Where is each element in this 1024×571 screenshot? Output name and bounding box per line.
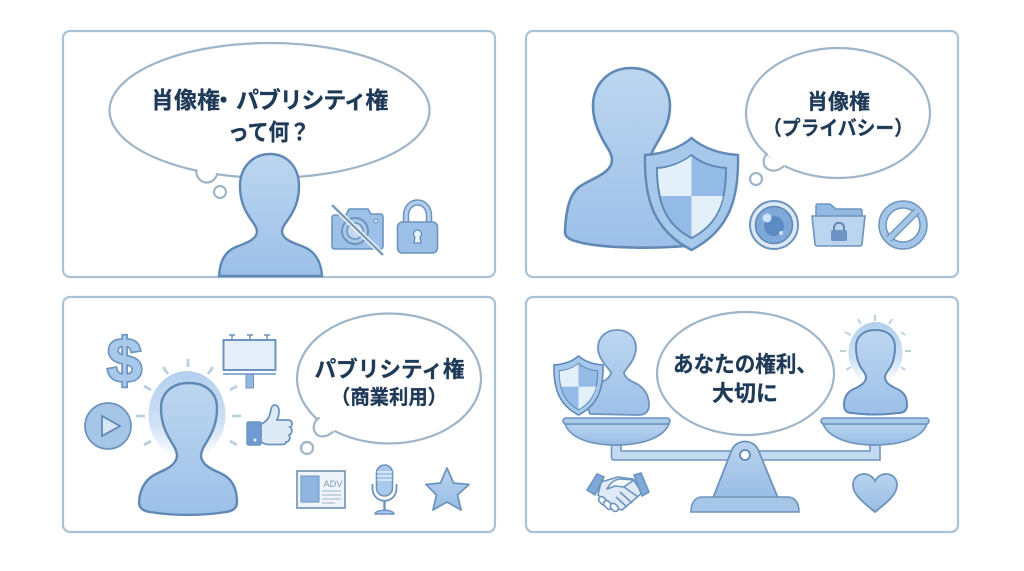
icon: padlock xyxy=(398,202,438,253)
icon: crossed-out camera xyxy=(332,205,383,255)
base xyxy=(691,497,799,512)
panel: take care of your rights xyxy=(526,297,958,532)
balance scale xyxy=(563,418,929,512)
icon: camera lens xyxy=(750,201,798,249)
icon: play button xyxy=(85,403,131,449)
heading: portrait rights (privacy): （プライバシー） xyxy=(763,117,913,140)
icon: locked folder xyxy=(812,204,865,246)
heading: publicity rights (commercial use) xyxy=(314,357,464,409)
icon: thumbs up xyxy=(247,405,292,445)
left pan xyxy=(563,418,670,445)
panel: portrait rights and privacy xyxy=(526,31,958,277)
icon: newspaper advert xyxy=(297,471,345,508)
heading: publicity rights (commercial use): （商業利用） xyxy=(331,386,447,409)
heading: take care of your rights xyxy=(673,352,817,406)
icon: billboard xyxy=(223,335,276,388)
icon: newspaper advert: ADV xyxy=(324,479,342,489)
heading: what are portrait and publicity rights: パブリシティ権 xyxy=(236,87,388,113)
speech bubble xyxy=(297,314,481,454)
icon: handshake xyxy=(587,473,649,513)
person with shield on left pan xyxy=(554,330,649,415)
icon: shield xyxy=(554,356,603,415)
icon: heart xyxy=(853,474,897,512)
icon: star xyxy=(426,468,469,510)
icon: shield xyxy=(645,138,738,250)
right pan xyxy=(821,418,929,445)
icon: prohibited sign xyxy=(879,201,927,249)
heading: what are portrait and publicity rights: って何？ xyxy=(228,119,310,145)
heading: take care of your rights: 大切に xyxy=(712,381,778,406)
heading: portrait rights (privacy) xyxy=(763,91,913,140)
heading: what are portrait and publicity rights: ・ xyxy=(212,87,235,113)
panel: publicity rights xyxy=(63,297,495,532)
speech bubble xyxy=(657,312,834,435)
heading: what are portrait and publicity rights xyxy=(151,87,388,145)
icon: dollar sign: $ xyxy=(107,327,142,396)
heading: what are portrait and publicity rights: 肖像権 xyxy=(151,87,220,113)
glow and rays xyxy=(136,359,241,459)
heading: publicity rights (commercial use): パブリシティ権 xyxy=(314,357,464,382)
person silhouette xyxy=(565,68,695,248)
speech bubble xyxy=(746,48,930,185)
person silhouette xyxy=(219,154,322,276)
panel: what are the rights xyxy=(63,31,495,277)
heading: take care of your rights: あなたの権利、 xyxy=(673,352,817,377)
person silhouette xyxy=(139,383,237,515)
icon: microphone xyxy=(372,465,396,514)
fulcrum xyxy=(713,442,778,498)
person with glow on right pan xyxy=(840,315,911,414)
heading: portrait rights (privacy): 肖像権 xyxy=(807,91,870,114)
beam xyxy=(612,445,880,460)
speech bubble xyxy=(110,43,430,198)
